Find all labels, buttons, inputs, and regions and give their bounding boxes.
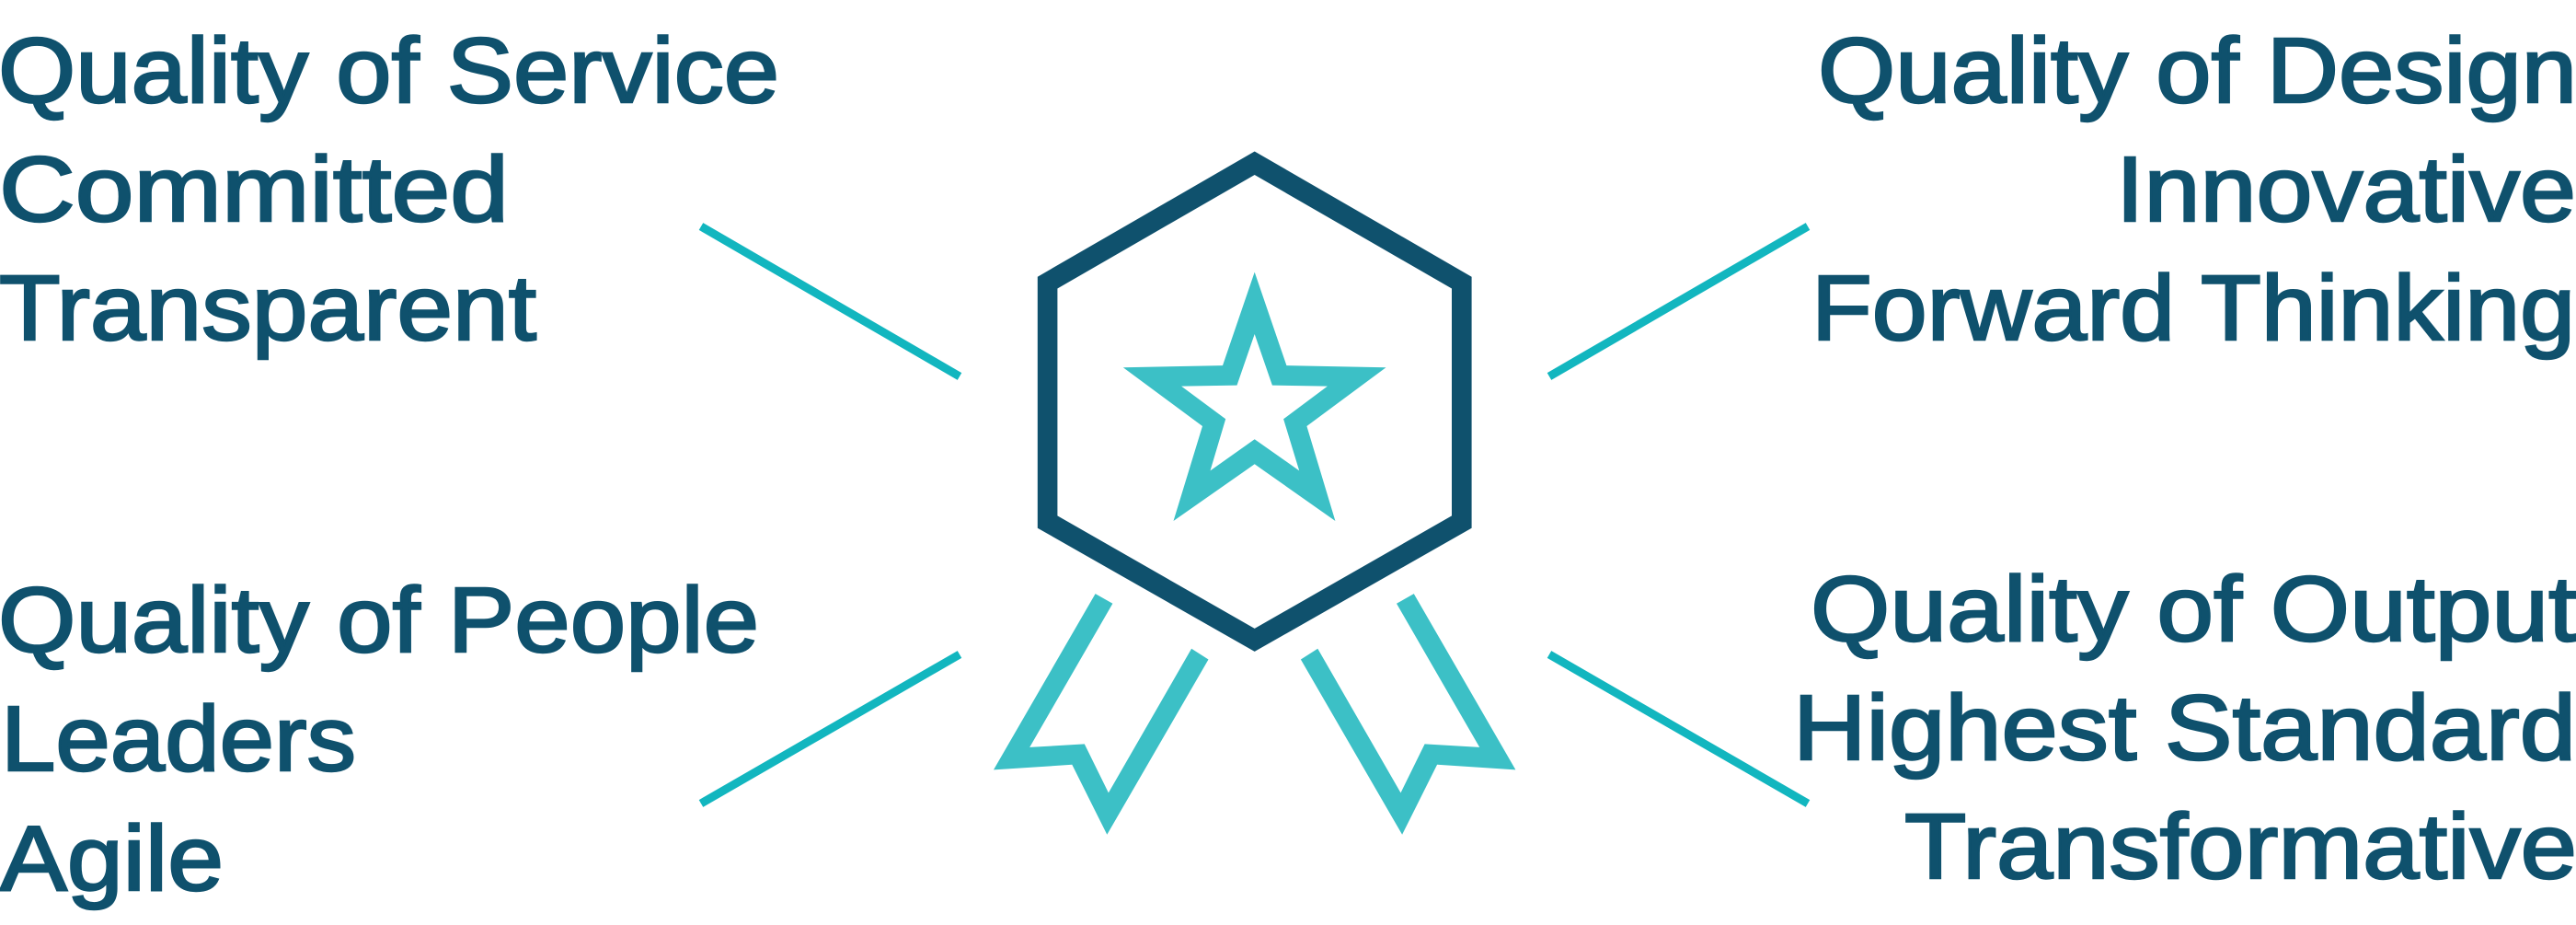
text block: quality of people: Quality of People [0,569,759,672]
icon: quality badge [994,151,1515,835]
connector line: bottom left [701,654,960,804]
text block: quality of service: Committed [0,138,509,241]
text block: quality of service: Transparent [0,257,536,360]
text block: quality of service: Quality of Service [0,19,779,122]
text block: quality of output: Quality of Output [1811,558,2576,661]
text block: quality of service [0,19,779,360]
icon: right ribbon [1301,594,1515,835]
connector line: top right [1549,226,1808,376]
text block: quality of design: Quality of Design [1818,19,2576,122]
icon: hexagon [1038,151,1472,652]
text block: quality of people [0,569,759,910]
connector line: bottom right [1549,654,1808,804]
text block: quality of output: Highest Standard [1793,676,2576,780]
text block: quality of design: Forward Thinking [1811,257,2575,360]
text block: quality of people: Leaders [1,688,356,791]
text block: quality of design [1811,19,2576,360]
text block: quality of output: Transformative [1904,795,2576,898]
text block: quality of output [1793,558,2576,898]
icon: star [1123,272,1386,521]
text block: quality of people: Agile [0,807,224,910]
icon: left ribbon [994,594,1209,835]
text block: quality of design: Innovative [2116,138,2576,241]
connector line: top left [701,226,960,376]
